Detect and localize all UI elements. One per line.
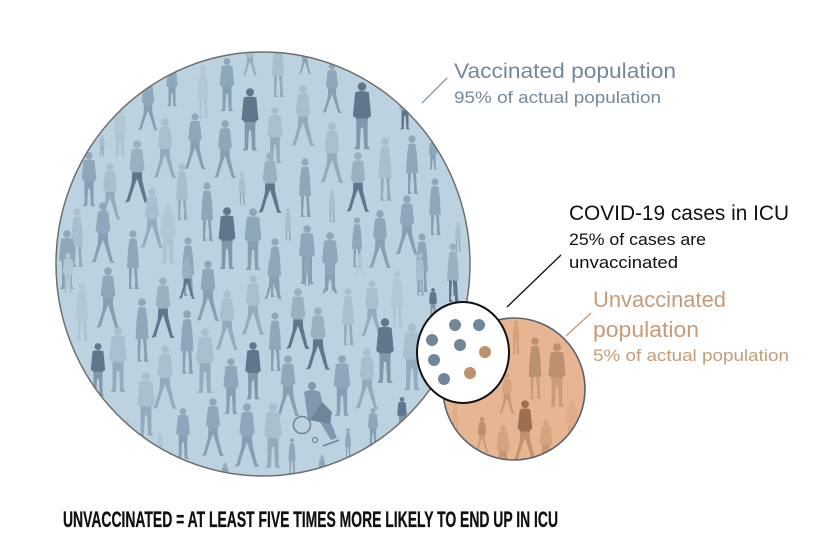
panel: COVID-19 ICU cases circle <box>417 302 509 403</box>
dot: unvaccinated case <box>479 346 491 358</box>
icon: person in wheelchair <box>294 382 339 446</box>
text: unvaccinated label: population <box>593 317 699 342</box>
arrow: ICU leader line <box>507 255 561 307</box>
dot: vaccinated case <box>428 354 440 366</box>
text: ICU label: unvaccinated <box>569 253 678 272</box>
heading: bottom conclusion: UNVACCINATED = AT LEAST FIVE TIMES MORE LIKELY TO END UP IN ICU <box>63 507 558 532</box>
text: ICU label: 25% of cases are <box>569 230 706 249</box>
dot: unvaccinated case <box>464 367 476 379</box>
dot: vaccinated case <box>426 334 438 346</box>
panel: vaccinated population circle <box>56 38 470 492</box>
dot: vaccinated case <box>473 319 485 331</box>
panel: unvaccinated population circle <box>443 318 585 472</box>
text: ICU label: COVID-19 cases in ICU <box>569 202 789 225</box>
crowd of vaccinated people <box>59 38 461 492</box>
crowd of unvaccinated people <box>452 320 578 472</box>
text: vaccinated label <box>454 60 676 107</box>
text: unvaccinated label <box>593 287 789 365</box>
arrow: unvaccinated leader line <box>566 313 591 336</box>
text: unvaccinated label: Unvaccinated <box>593 287 726 312</box>
dot: vaccinated case <box>438 373 450 385</box>
text: vaccinated label: Vaccinated population <box>454 60 676 83</box>
arrow: vaccinated leader line <box>422 78 447 103</box>
text: vaccinated label: 95% of actual population <box>454 88 661 107</box>
text: ICU label <box>569 202 789 272</box>
text: unvaccinated label: 5% of actual population <box>593 346 789 365</box>
dot: vaccinated case <box>449 319 461 331</box>
dot: vaccinated case <box>454 339 466 351</box>
